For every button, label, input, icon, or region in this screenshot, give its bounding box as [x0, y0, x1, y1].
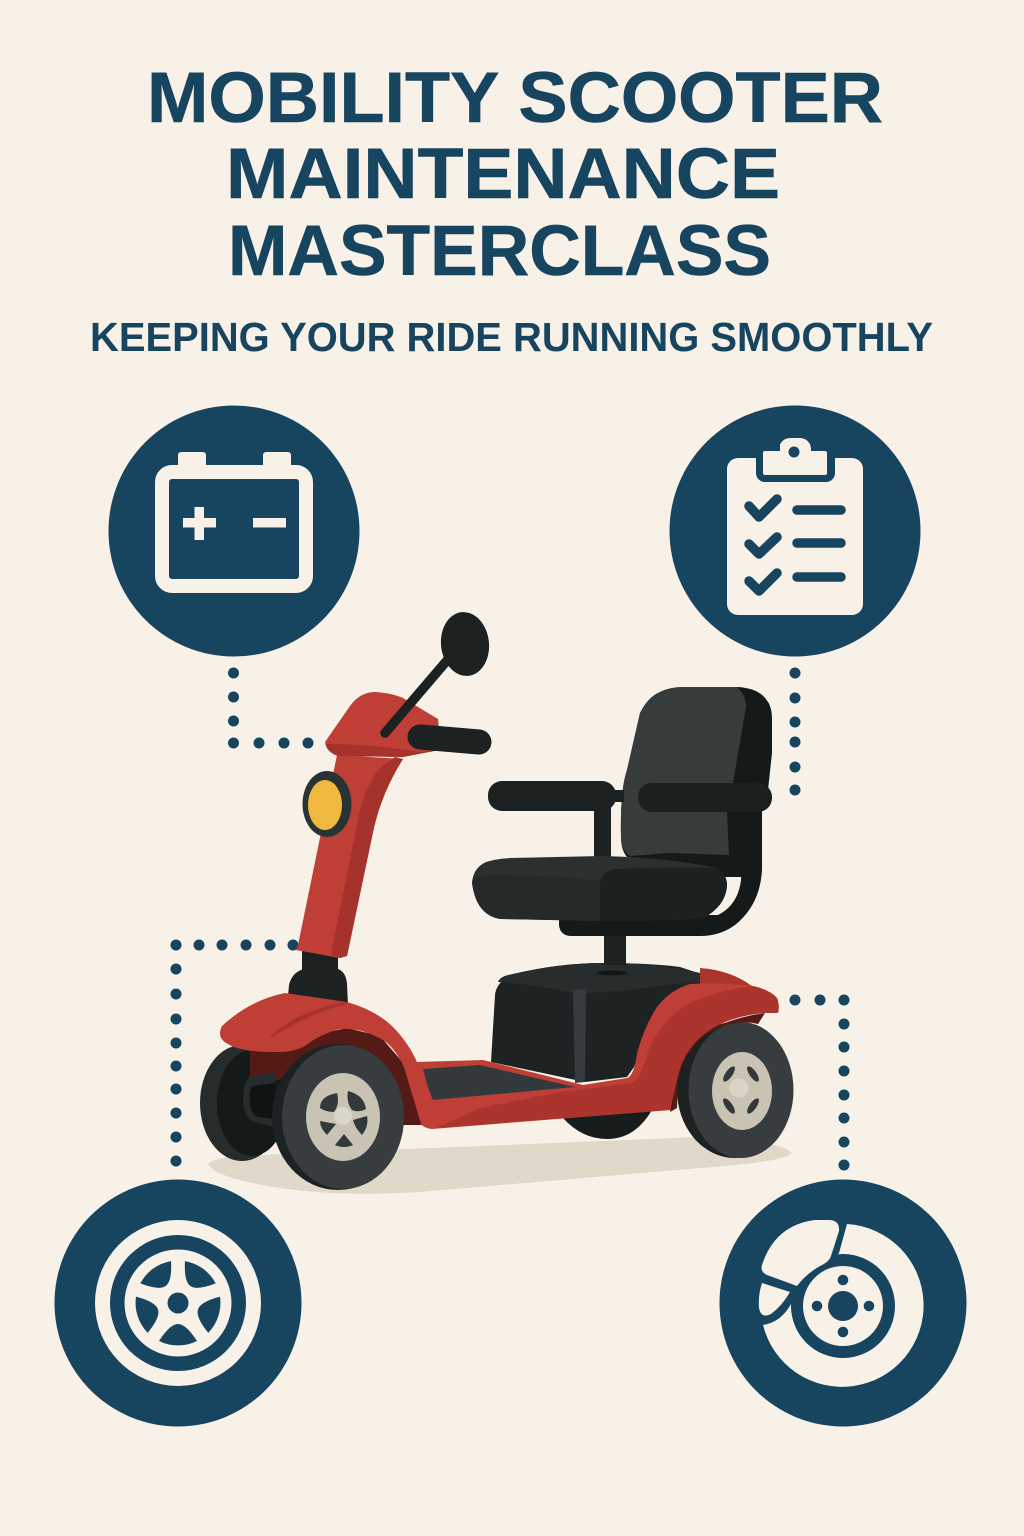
- subtitle: KEEPING YOUR RIDE RUNNING SMOOTHLY: [90, 314, 933, 360]
- seat back: [621, 687, 772, 877]
- seat cushion: [472, 856, 727, 921]
- tiller neck and boot: [288, 948, 348, 1005]
- scooter illustration: [200, 610, 794, 1190]
- dotted connector: checklist to seat: [790, 668, 800, 796]
- ground shadow: [208, 1137, 792, 1194]
- tiller head: [325, 692, 439, 757]
- headlight: [302, 771, 352, 837]
- rear back-left front wheel: [200, 1045, 287, 1161]
- left armrest: [488, 781, 624, 860]
- steering bracket: [243, 1072, 275, 1127]
- front fender: [220, 993, 432, 1129]
- tiller column: [296, 755, 403, 958]
- icon: battery: [108, 406, 360, 656]
- dotted connector: battery to handlebar: [228, 668, 314, 748]
- battery box and seat base: [491, 935, 704, 1083]
- mirror: [385, 610, 492, 733]
- front wheel: [272, 1044, 404, 1190]
- rear wheel arch: [670, 1013, 765, 1112]
- icon: checklist clipboard: [670, 406, 920, 656]
- title: MASTERCLASS: [228, 212, 771, 291]
- icon: brake disc: [720, 1180, 966, 1426]
- upper rear fender: [700, 968, 752, 990]
- right armrest: [638, 783, 772, 812]
- title: MOBILITY SCOOTER: [147, 59, 883, 138]
- handlebar grip: [420, 737, 479, 742]
- title: MAINTENANCE: [226, 135, 780, 214]
- front wheel arch shadow: [250, 1028, 422, 1125]
- under-belly wheel: [563, 1110, 652, 1139]
- title: [147, 59, 883, 291]
- seat back support strut: [559, 810, 762, 936]
- red frame and rear fender: [417, 983, 779, 1129]
- icon: wheel and tire: [54, 1180, 302, 1426]
- rear wheel: [677, 1022, 794, 1158]
- dotted connector: tire to front wheel: [170, 940, 298, 1166]
- dotted connector: brake to rear wheel: [790, 994, 850, 1170]
